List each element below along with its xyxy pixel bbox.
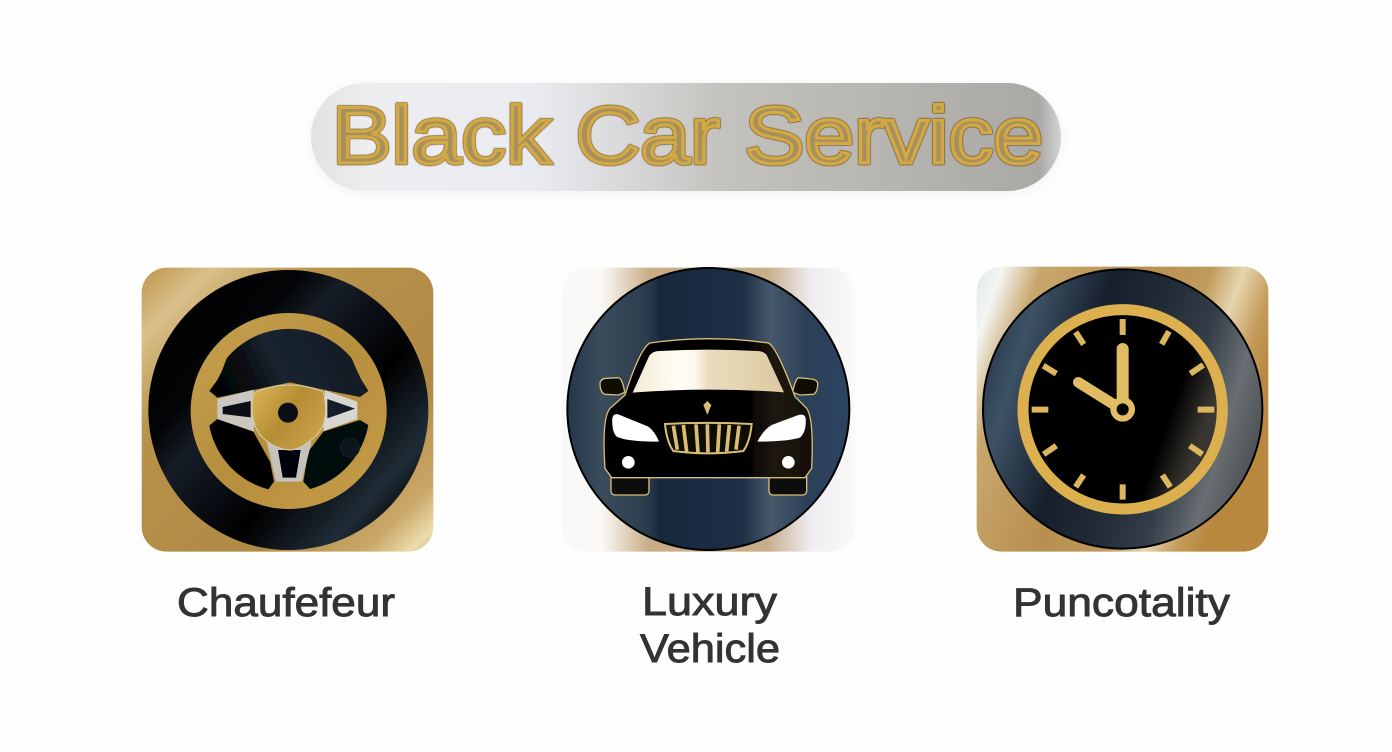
label: chauffeur: Chaufefeur <box>177 581 395 625</box>
icon: steering wheel <box>191 313 387 509</box>
label: luxury vehicle <box>640 580 780 671</box>
label: luxury vehicle: Vehicle <box>640 627 780 671</box>
icon: car <box>600 339 818 495</box>
panel: chauffeur icon <box>142 268 433 552</box>
label: luxury vehicle: Luxury <box>642 580 777 624</box>
panel: punctuality icon <box>977 267 1268 552</box>
title pill <box>311 83 1061 193</box>
label: punctuality: Puncotality <box>1013 581 1230 625</box>
icon: clock <box>1023 310 1222 509</box>
title: Black Car Service <box>332 91 1043 181</box>
panel: luxury vehicle icon <box>562 268 855 552</box>
